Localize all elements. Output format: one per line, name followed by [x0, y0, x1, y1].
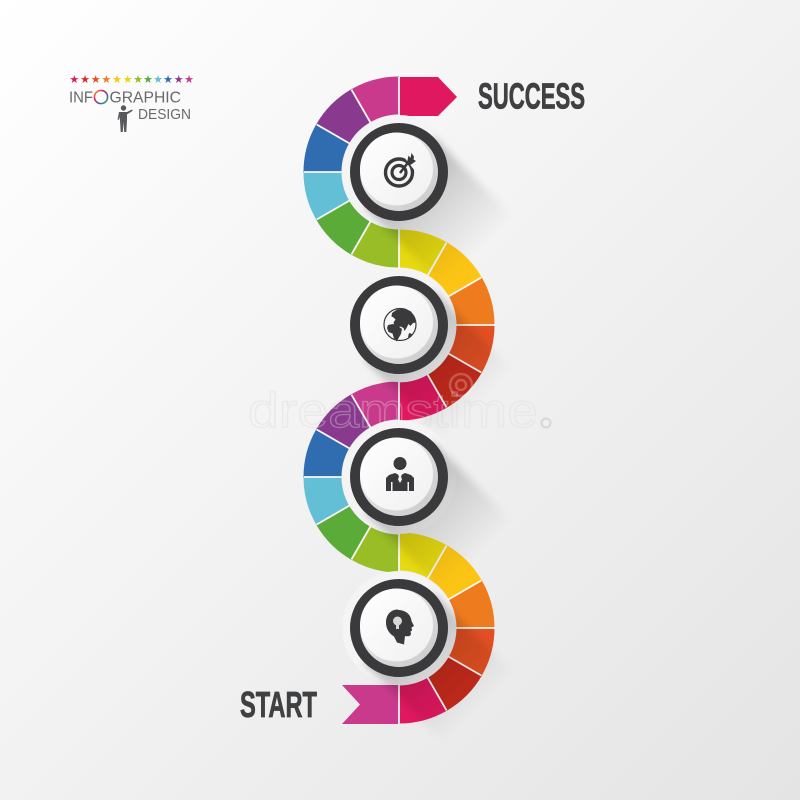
icon: head with bulb — [386, 610, 414, 644]
ribbon section 4: lower right arc — [399, 552, 476, 704]
segment: crimson — [399, 391, 437, 402]
segment: green — [333, 515, 361, 543]
segment: olive — [361, 238, 399, 248]
logo person — [118, 105, 133, 132]
long shadow — [364, 137, 513, 286]
logo stars: ★ — [133, 74, 143, 86]
halo — [342, 115, 456, 229]
segment: red — [437, 666, 465, 694]
inner disc — [360, 286, 433, 358]
logo stars: ★ — [153, 74, 163, 86]
logo stars: ★ — [184, 74, 194, 86]
segment: purple — [333, 106, 361, 134]
segment: yellow — [399, 552, 437, 562]
segment: blue — [322, 439, 333, 477]
circle 1: target / success — [342, 115, 513, 286]
segment: crimson — [399, 694, 437, 704]
dark ring — [355, 128, 443, 216]
segment: magenta — [361, 96, 399, 106]
segment: purple — [333, 411, 361, 439]
segment: red — [437, 363, 465, 391]
ribbon section 3: lower left arc — [322, 400, 399, 554]
logo stars: ★ — [143, 74, 153, 86]
label: start: START — [240, 684, 317, 725]
segment: amber — [437, 259, 465, 287]
flag: start end of ribbon — [342, 685, 399, 724]
logo stars: ★ — [101, 74, 111, 86]
segment: orange — [465, 590, 476, 628]
segment: light blue — [322, 172, 333, 210]
logo colour ring — [94, 90, 108, 104]
icon: target with arrow — [386, 153, 421, 186]
watermark: dreamstime — [248, 385, 538, 438]
segment: green — [333, 210, 361, 238]
dark ring — [355, 281, 443, 369]
halo — [342, 268, 456, 382]
inner disc — [360, 132, 433, 206]
segment: light blue — [322, 477, 333, 515]
long shadow — [364, 593, 513, 742]
segment: orange red — [465, 325, 476, 363]
logo stars: ★ — [112, 74, 122, 86]
dark ring — [355, 584, 443, 672]
long shadow — [364, 442, 513, 591]
circle 3: businessman — [342, 420, 513, 591]
logo: infographic design — [69, 74, 194, 132]
segment: blue — [322, 134, 333, 172]
watermark: dreamstime — [248, 385, 538, 438]
logo word: GRAPHIC: GRAPHIC — [110, 90, 181, 106]
segment: amber — [437, 562, 465, 590]
logo stars: ★ — [163, 74, 173, 86]
logo stars: ★ — [91, 74, 101, 86]
inner disc — [360, 438, 433, 510]
circle 2: globe — [342, 268, 513, 439]
segment: orange — [465, 287, 476, 325]
label: success: SUCCESS — [478, 76, 585, 116]
logo stars — [69, 74, 194, 86]
arrow: success end of ribbon — [399, 77, 457, 116]
segment: orange red — [465, 628, 476, 666]
long shadow — [364, 290, 513, 439]
halo — [342, 420, 456, 534]
logo stars: ★ — [80, 74, 90, 86]
ribbon section 1: upper left arc — [322, 96, 399, 248]
segment: yellow — [399, 248, 437, 259]
ribbon section 2: upper right arc — [399, 248, 476, 402]
logo word: DESIGN: DESIGN — [138, 106, 191, 123]
dark ring — [355, 433, 443, 521]
watermark — [248, 374, 550, 438]
logo word: INF: INF — [69, 90, 93, 106]
logo stars: ★ — [69, 74, 79, 86]
segment: olive — [361, 543, 399, 554]
circle 4: head with light bulb — [342, 571, 513, 742]
segment: magenta — [361, 400, 399, 411]
logo stars: ★ — [174, 74, 184, 86]
inner disc — [360, 588, 433, 662]
halo — [342, 571, 456, 685]
logo stars: ★ — [123, 74, 133, 86]
icon: businessman — [386, 457, 414, 491]
icon: globe — [384, 308, 416, 342]
